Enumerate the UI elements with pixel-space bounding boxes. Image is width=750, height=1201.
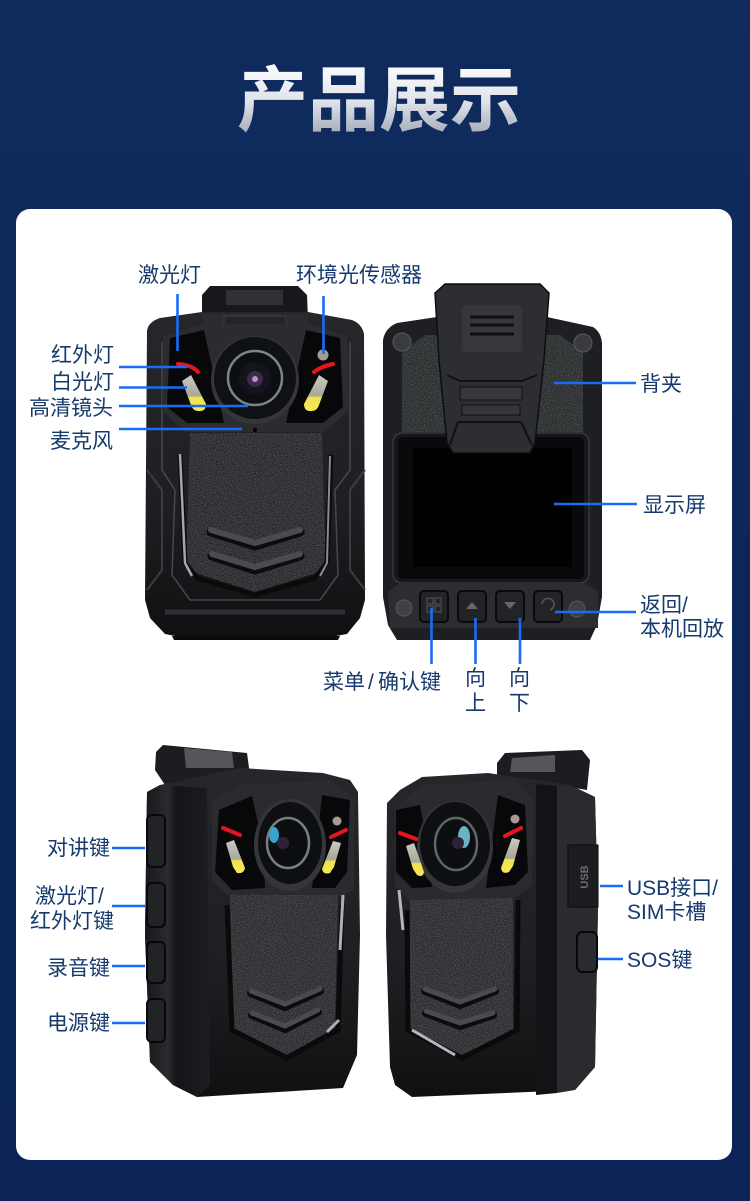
callout labels — [29, 264, 724, 1035]
camera: front view — [145, 286, 365, 640]
body shell — [145, 768, 360, 1097]
centre textured panel — [410, 898, 513, 1055]
lens — [254, 799, 326, 891]
lens — [417, 801, 493, 893]
right LED — [501, 838, 520, 873]
belt clip — [435, 284, 549, 453]
back button — [534, 591, 562, 622]
label: white light: 白光灯 — [51, 371, 114, 394]
side buttons — [147, 815, 165, 1042]
chevrons — [425, 989, 495, 1026]
left LED — [226, 840, 245, 873]
title: 产品展示 — [237, 62, 521, 141]
lower left screw — [396, 600, 412, 616]
side face — [536, 784, 557, 1095]
label: talk key: 对讲键 — [47, 837, 110, 860]
right white LED — [304, 375, 328, 411]
body shell — [386, 773, 598, 1097]
button strip — [388, 583, 598, 628]
left red infrared bar — [178, 364, 198, 372]
panel: product display card — [16, 209, 732, 1160]
up button — [458, 591, 486, 622]
label: down: 向 — [509, 667, 530, 690]
label: laser / infrared key: 激光灯/ — [35, 885, 104, 908]
eye panel surround — [162, 324, 349, 432]
ambient light sensor — [318, 350, 328, 360]
label: record key: 录音键 — [47, 957, 110, 980]
callout lines — [112, 294, 637, 1023]
microphone hole — [253, 428, 257, 432]
label: menu / confirm: / — [368, 671, 374, 694]
SOS button — [577, 932, 597, 972]
body shell — [145, 312, 365, 638]
label: back / local playback: 返回/ — [640, 594, 688, 617]
red bars — [400, 828, 521, 839]
centre textured panel — [230, 895, 338, 1055]
right red infrared bar — [314, 364, 333, 372]
eye shell — [395, 780, 534, 902]
side face — [145, 785, 210, 1097]
clip — [155, 745, 250, 785]
USB door: USB — [579, 865, 591, 889]
label: USB port / SIM slot: SIM卡槽 — [627, 901, 706, 924]
display screen — [393, 433, 589, 583]
side face outer — [557, 785, 598, 1093]
label: USB port / SIM slot: USB接口/ — [627, 877, 718, 900]
label: HD lens: 高清镜头 — [29, 397, 113, 420]
right eye panel — [286, 330, 343, 423]
label: laser light: 激光灯 — [138, 264, 201, 287]
label: menu / confirm: 菜单 — [323, 671, 365, 694]
chevrons — [211, 530, 300, 570]
USB door — [568, 845, 598, 907]
label: back / local playback: 本机回放 — [640, 618, 724, 641]
label: laser / infrared key: 红外灯键 — [30, 910, 114, 933]
centre textured panel — [186, 433, 326, 592]
menu button — [420, 591, 448, 622]
label: down: 下 — [509, 692, 530, 715]
down button — [496, 591, 524, 622]
red bars — [223, 828, 346, 837]
textured back plate — [402, 335, 583, 432]
clip — [497, 750, 590, 790]
label: power key: 电源键 — [47, 1012, 110, 1035]
label: back clip: 背夹 — [640, 373, 682, 396]
label: menu / confirm: 确认键 — [378, 671, 441, 694]
left white LED — [182, 375, 206, 411]
left eye panel — [215, 796, 265, 890]
label: microphone: 麦克风 — [50, 430, 113, 453]
camera: back view — [383, 284, 602, 640]
left eye panel — [167, 330, 224, 423]
clip hinge — [226, 290, 283, 305]
eye shell — [212, 780, 354, 897]
left eye panel — [396, 805, 432, 888]
chevrons — [251, 989, 320, 1029]
left LED — [406, 843, 424, 876]
right eye panel — [312, 795, 350, 888]
right eye panel — [486, 795, 528, 888]
camera: left three-quarter view — [145, 745, 360, 1097]
label: up: 向 — [465, 667, 486, 690]
camera: right three-quarter view — [386, 750, 598, 1097]
sensor — [510, 814, 520, 824]
label: ambient light sensor: 环境光传感器 — [296, 264, 422, 287]
label: infrared light: 红外灯 — [51, 344, 114, 367]
label: up: 上 — [465, 692, 486, 715]
upper left screw — [393, 333, 411, 351]
back clip tab — [202, 286, 308, 320]
lens — [211, 336, 299, 424]
body shell — [383, 317, 602, 640]
label: display: 显示屏 — [643, 494, 706, 517]
lower right screw — [569, 601, 585, 617]
sensor — [332, 816, 342, 826]
head plate — [186, 314, 324, 430]
label: SOS key: SOS键 — [627, 949, 692, 972]
upper right screw — [574, 334, 592, 352]
right LED — [322, 841, 341, 874]
